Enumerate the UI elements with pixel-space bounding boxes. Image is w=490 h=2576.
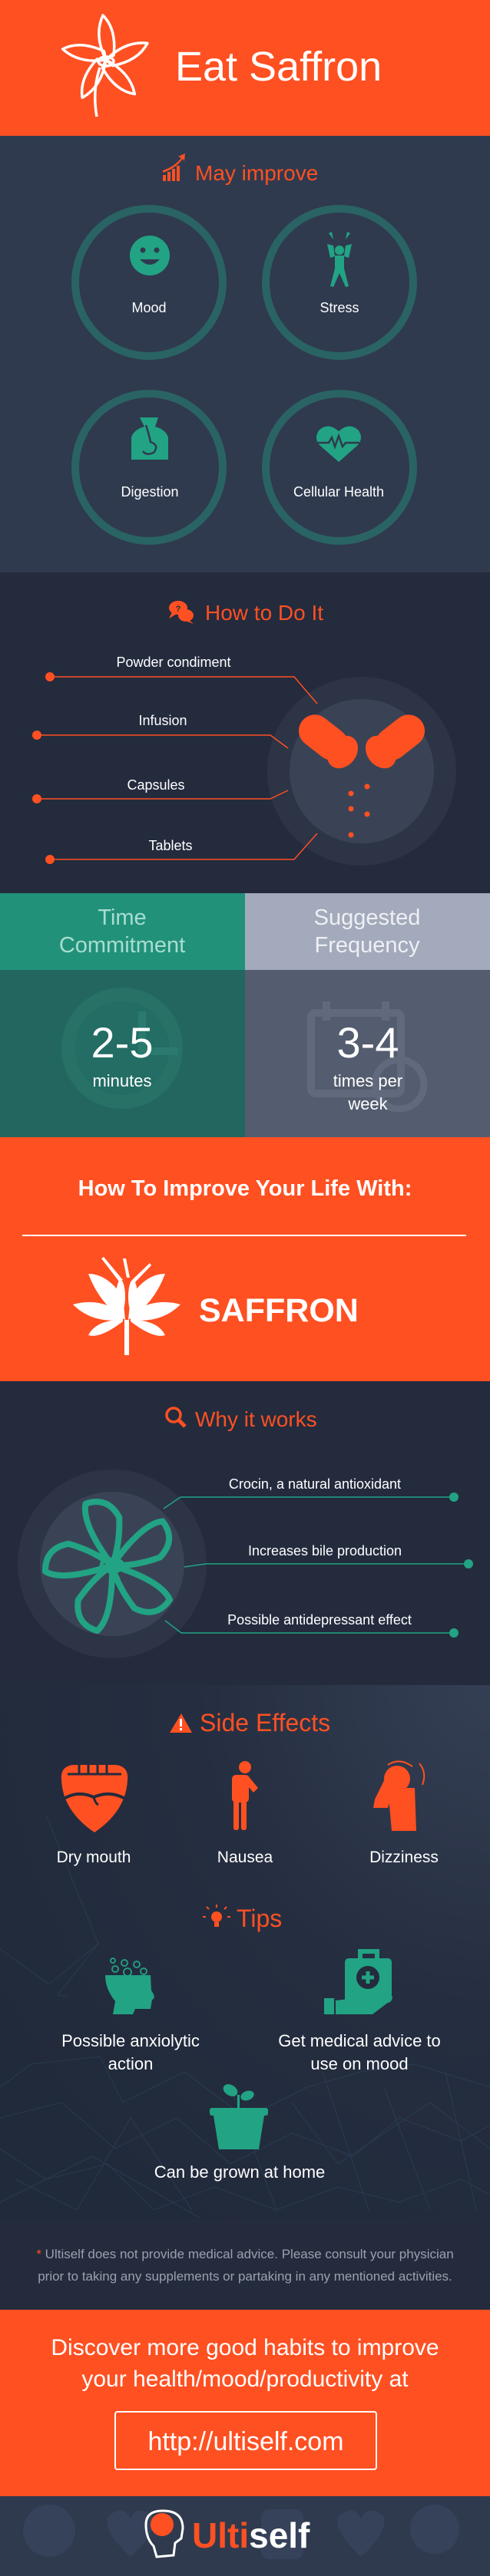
panel: suggested frequency: Suggested (314, 905, 420, 930)
icon: smiley (130, 236, 170, 275)
list: reasons (164, 1476, 473, 1638)
icon: header flower outline (61, 15, 151, 117)
footer logo: Ultiself (192, 2515, 310, 2555)
list: methods: Infusion (138, 713, 187, 728)
list: methods (32, 655, 317, 864)
panel: suggested frequency: week (347, 1094, 389, 1113)
circle: stress: Stress (319, 300, 359, 315)
disclaimer (0, 2219, 490, 2310)
illustration: green flower (18, 1469, 207, 1658)
item: dry mouth (57, 1765, 131, 1866)
item: nausea: Nausea (217, 1849, 273, 1866)
banner: how to improve: SAFFRON (199, 1292, 359, 1329)
panel: time commitment: 2-5 (91, 1018, 153, 1067)
call to action (0, 2310, 490, 2496)
list: methods: Tablets (148, 838, 193, 853)
panel: how to do it (0, 572, 490, 893)
icon: brain logo (146, 2511, 183, 2557)
list: reasons: Crocin, a natural antioxidant (229, 1476, 401, 1492)
header band (0, 0, 490, 136)
circle: mood (75, 209, 223, 356)
item: anxiolytic: action (108, 2054, 153, 2073)
item: medical advice: use on mood (310, 2054, 409, 2073)
heading: tips: Tips (237, 1905, 282, 1932)
title: Eat Saffron (175, 44, 382, 90)
item: dizziness: Dizziness (369, 1849, 439, 1866)
heading: tips (203, 1905, 282, 1932)
item: medical advice: Get medical advice to (278, 2031, 441, 2050)
call to action: Discover more good habits to improve (51, 2335, 439, 2360)
panel: time commitment: Commitment (59, 933, 185, 958)
circle: cellular health: Cellular Health (293, 484, 384, 500)
panel: time commitment: Time (98, 905, 147, 930)
circle: cellular health (266, 394, 413, 541)
item: medical advice (278, 1949, 441, 2073)
heading: how to do it: ? (176, 605, 181, 614)
circle: stress (266, 209, 413, 356)
panel: suggested frequency (245, 893, 490, 1137)
heading: how to do it: How to Do It (205, 601, 323, 625)
heading: may improve: May improve (195, 161, 318, 185)
list: methods: Powder condiment (116, 655, 231, 670)
panel: may improve (0, 136, 490, 572)
panel: suggested frequency: times per (333, 1071, 402, 1090)
panel: suggested frequency: 3-4 (337, 1018, 399, 1067)
footer logo (0, 2496, 490, 2576)
item: anxiolytic (61, 1958, 200, 2073)
item: anxiolytic: Possible anxiolytic (61, 2031, 200, 2050)
item: dry mouth: Dry mouth (57, 1849, 131, 1866)
icon: heart pulse (316, 426, 361, 462)
list: reasons: Increases bile production (248, 1543, 402, 1558)
heading: why it works: Why it works (195, 1407, 317, 1431)
url box: http://ultiself.com (147, 2427, 344, 2456)
item: dizziness (369, 1761, 439, 1866)
circle: digestion (75, 394, 223, 541)
circle: mood: Mood (131, 300, 167, 315)
item: grow at home: Can be grown at home (154, 2162, 325, 2182)
icon: stressed person (327, 232, 352, 287)
panel: suggested frequency: Frequency (314, 933, 420, 958)
disclaimer: * Ultiself does not provide medical advice. Please consult your physician (36, 2247, 454, 2261)
item: nausea (217, 1761, 273, 1866)
network background (0, 1815, 490, 2218)
panel: side effects and tips (0, 1685, 490, 2219)
heading: side effects: Side Effects (200, 1709, 330, 1737)
icon: faint calendar (311, 1001, 424, 1109)
icon: faint clock (68, 994, 178, 1102)
heading: may improve (163, 153, 318, 185)
panel: why it works (0, 1381, 490, 1685)
icon: saffron flower white (73, 1257, 180, 1355)
list: methods: Capsules (127, 777, 185, 793)
panel: time commitment (0, 893, 245, 1137)
list: reasons: Possible antidepressant effect (227, 1612, 412, 1628)
banner: how to improve: How To Improve Your Life With: (78, 1176, 412, 1201)
item: grow at home (154, 2082, 325, 2182)
panel: time commitment: minutes (92, 1071, 152, 1090)
url box (115, 2412, 376, 2469)
icon: torso digestion (131, 417, 168, 460)
disclaimer: prior to taking any supplements or partaking in any mentioned activities. (38, 2269, 452, 2284)
banner: how to improve (0, 1137, 490, 1381)
call to action: your health/mood/productivity at (81, 2367, 409, 2392)
circle: digestion: Digestion (121, 484, 179, 500)
pill illustration (267, 677, 456, 866)
